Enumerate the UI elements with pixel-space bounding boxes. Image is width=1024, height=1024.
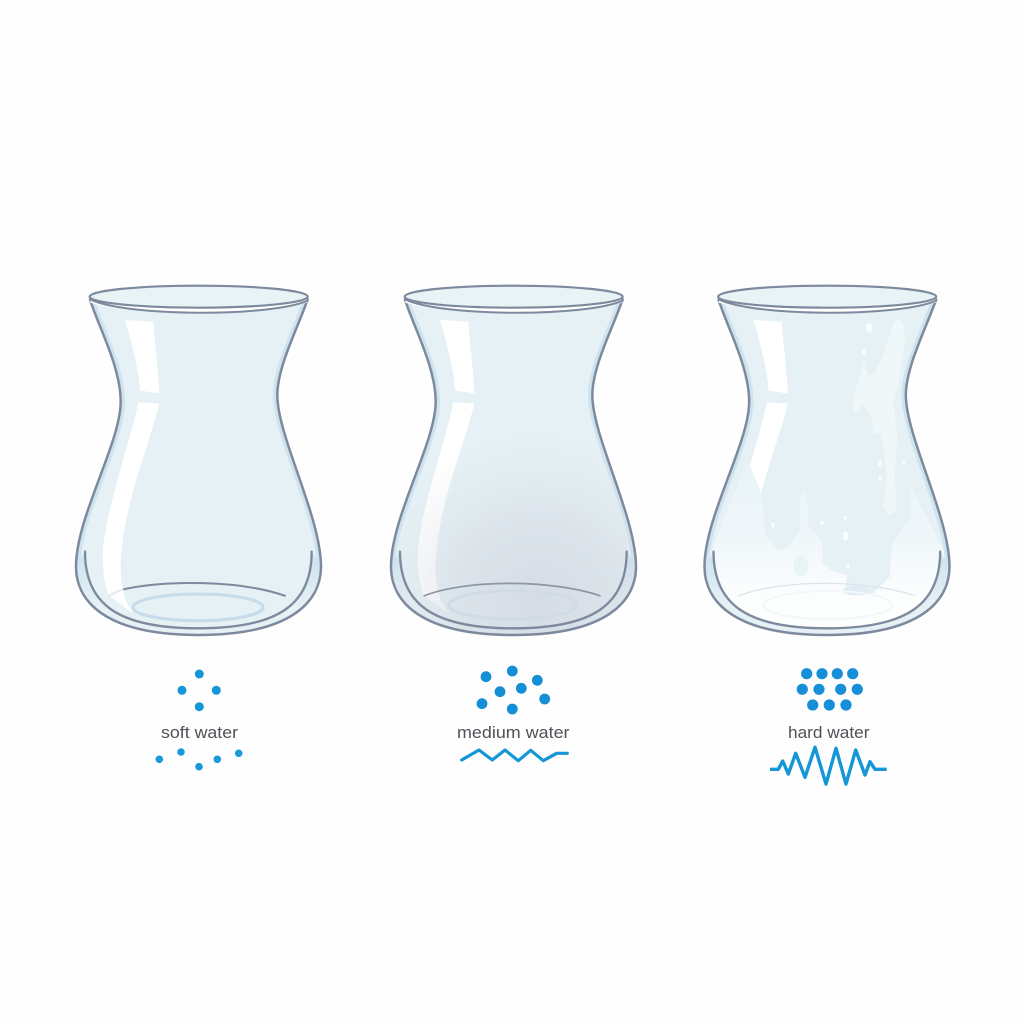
glass: hard water <box>703 286 953 637</box>
hard water wave <box>770 747 887 784</box>
back base line <box>424 583 601 596</box>
soft water scattered dots <box>156 748 242 770</box>
cloudy mineral haze <box>418 493 632 634</box>
medium water mineral dots <box>477 666 550 714</box>
base ring <box>133 594 263 621</box>
hard water mineral dots <box>797 668 863 711</box>
label: soft water: soft water <box>161 724 239 742</box>
back base line <box>123 583 286 596</box>
limescale stains <box>703 318 953 637</box>
label: hard water: hard water <box>788 724 870 742</box>
faint base ring <box>763 591 892 619</box>
base ring <box>449 591 577 619</box>
faint back base line <box>738 583 915 596</box>
soft water mineral dots <box>178 670 221 711</box>
glass: medium water <box>390 284 638 636</box>
glass: soft water <box>76 286 321 635</box>
label: medium water: medium water <box>457 724 570 742</box>
medium water wave <box>462 750 567 761</box>
